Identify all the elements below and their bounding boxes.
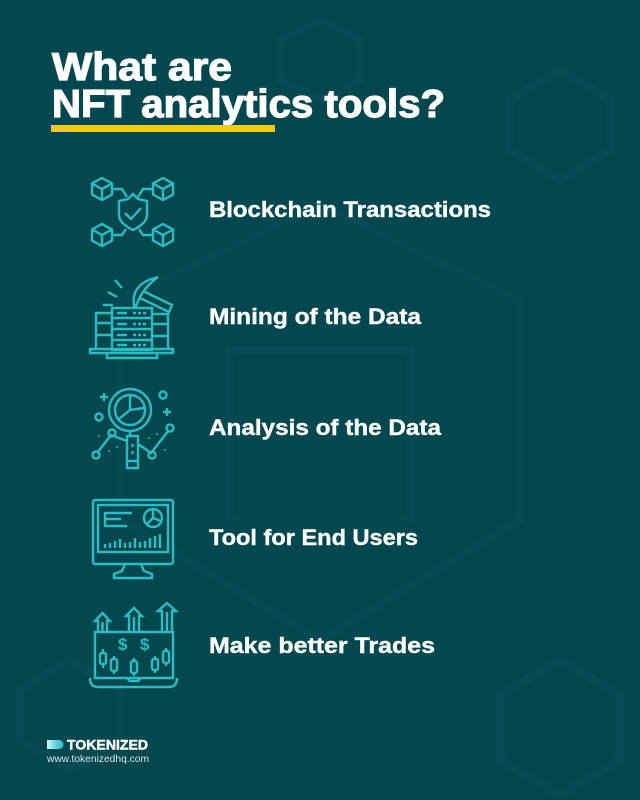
title underline: [51, 125, 275, 132]
icon: magnifier analysis: [92, 389, 174, 468]
icon: mining pickaxe and servers: [90, 277, 173, 358]
title: [52, 46, 445, 126]
icon: laptop with trading arrows: [90, 603, 177, 687]
title: NFT analytics tools?: [52, 83, 445, 126]
logo wordmark: TOKENIZED: [67, 736, 148, 752]
title: What are: [52, 46, 232, 89]
label: Mining of the Data: Mining of the Data: [209, 304, 422, 329]
label: Tool for End Users: Tool for End Users: [209, 525, 418, 550]
icon: laptop with trading arrows: $: [140, 635, 150, 654]
icon: blockchain shield: [92, 178, 173, 246]
icon: monitor dashboard: [93, 500, 173, 578]
label: Make better Trades: Make better Trades: [209, 633, 435, 658]
logo mark: [47, 740, 64, 749]
icon: laptop with trading arrows: $: [118, 635, 128, 654]
label: Blockchain Transactions: Blockchain Transactions: [209, 197, 491, 222]
website url: www.tokenizedhq.com: [46, 753, 149, 765]
logo: Tokenized: [47, 736, 148, 752]
label: Analysis of the Data: Analysis of the Data: [209, 415, 442, 440]
